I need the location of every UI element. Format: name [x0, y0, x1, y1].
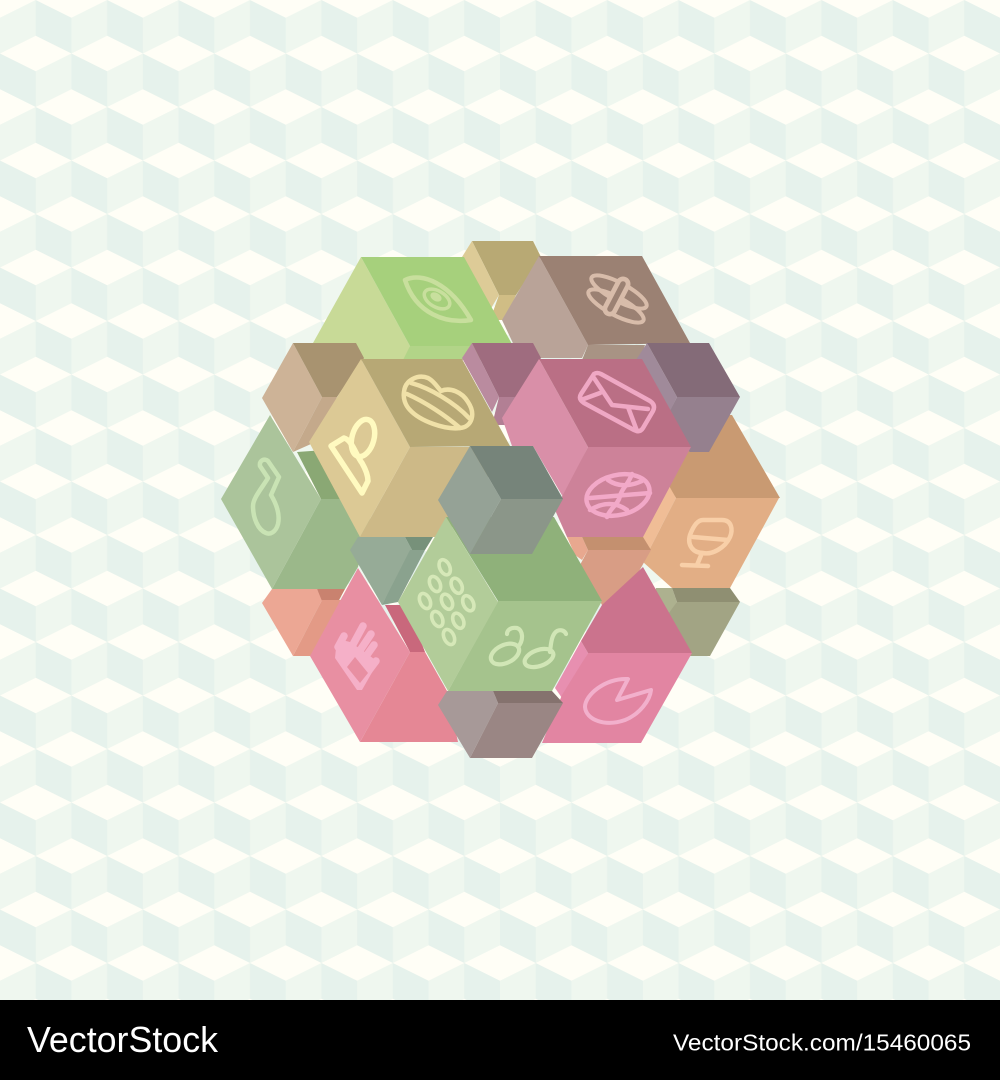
cube: gray-brown bottom — [438, 691, 563, 758]
cube: gray-green small — [350, 537, 433, 605]
cube: sage green left — [221, 415, 375, 589]
cube: pink lower left — [310, 568, 458, 742]
icon: wine glass — [682, 520, 731, 566]
cube: khaki lower right — [650, 588, 740, 656]
cube: brown top right — [502, 256, 690, 360]
icon: crossed pill — [584, 269, 651, 329]
cube: green centre large — [398, 517, 602, 691]
icon: pear outline — [253, 460, 279, 534]
cube: salmon lower left — [262, 589, 345, 656]
icon: script glyphs — [488, 628, 566, 671]
icon: pie chart — [585, 679, 651, 723]
icon: hand — [335, 626, 378, 690]
cube: gray centre — [438, 446, 563, 554]
icon: B letterform — [331, 417, 379, 493]
cube: light green top — [313, 257, 513, 360]
cube: orange right — [620, 415, 780, 588]
footer bar — [0, 1000, 1000, 1080]
icon: envelope — [580, 373, 654, 431]
footer: image reference: VectorStock.com/15460065 — [673, 1030, 971, 1056]
cube: pink centre right — [502, 359, 691, 537]
icon: coffee bean lips — [404, 377, 472, 428]
cube: mauve small centre — [462, 343, 541, 425]
icon: eye — [405, 278, 471, 321]
footer: brand wordmark: VectorStock — [27, 1019, 219, 1060]
cube: pink lower right — [542, 567, 692, 743]
cube: salmon under pink — [567, 537, 651, 605]
cube cluster — [221, 241, 780, 758]
cube: tan centre — [309, 359, 510, 537]
icon: ring dots — [417, 558, 476, 646]
cube: tan-brown small left — [262, 343, 364, 452]
cube: small tan top — [462, 241, 541, 320]
icon: basketball — [582, 468, 654, 522]
cube: purple small right — [636, 343, 740, 452]
